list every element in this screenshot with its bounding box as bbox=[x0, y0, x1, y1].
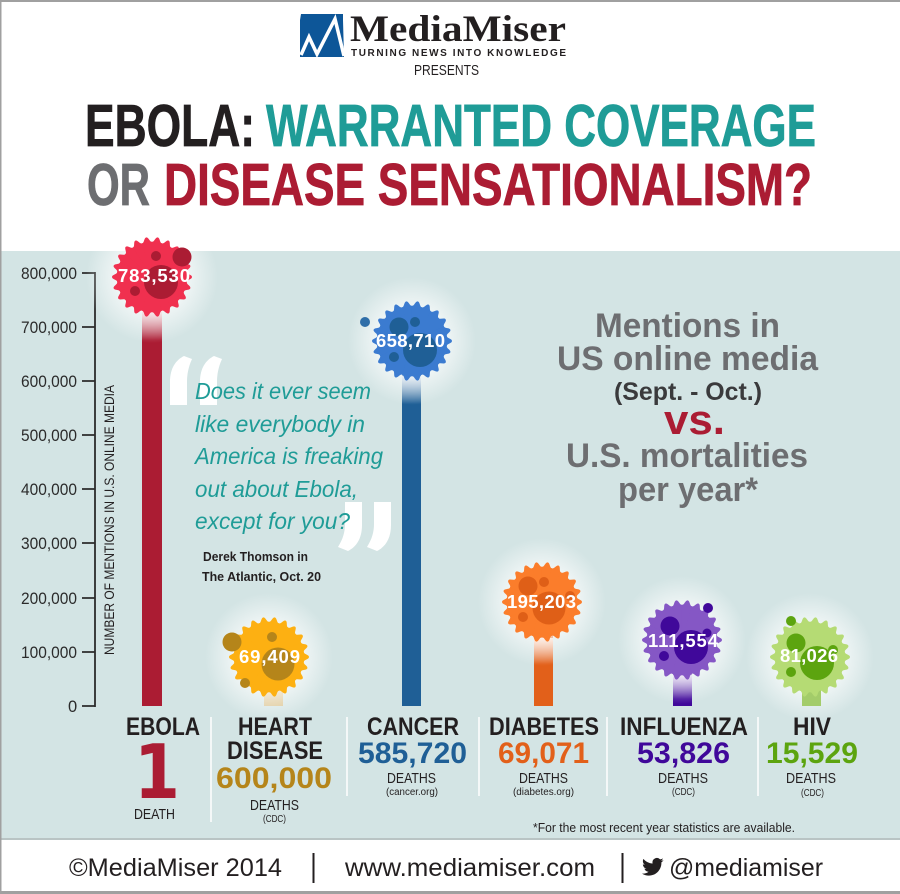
column: Influenza bbox=[620, 713, 748, 798]
column: Influenza: DEATHS bbox=[658, 770, 708, 787]
column: Influenza: (CDC) bbox=[672, 787, 695, 798]
column: Diabetes: DEATHS bbox=[519, 770, 568, 787]
column: Diabetes: 69,071 bbox=[498, 737, 589, 770]
footer bbox=[69, 853, 823, 883]
virus: HIV 81,026: 81,026 bbox=[780, 645, 838, 666]
footer website: www.mediamiser.com bbox=[344, 854, 595, 882]
logo: MediaMiser bbox=[300, 9, 566, 59]
presents label: PRESENTS bbox=[414, 62, 479, 79]
column: HIV: DEATHS bbox=[786, 770, 836, 787]
bar: Diabetes bbox=[478, 538, 606, 706]
quote text: Does it ever seem bbox=[195, 378, 371, 404]
footnote: *For the most recent year statistics are available. bbox=[533, 821, 795, 835]
heading: mentions vs mortalities: U.S. mortalities bbox=[566, 437, 808, 475]
bar: Cancer bbox=[348, 277, 476, 706]
footer twitter handle: @mediamiser bbox=[669, 854, 823, 882]
column: HIV: 15,529 bbox=[766, 737, 858, 770]
footer copyright: ©MediaMiser 2014 bbox=[69, 854, 282, 882]
column: Heart disease: (CDC) bbox=[263, 814, 286, 825]
title: OR bbox=[87, 152, 150, 218]
logo tagline: TURNING NEWS INTO KNOWLEDGE bbox=[351, 48, 566, 59]
heading: mentions vs mortalities: Mentions in bbox=[595, 307, 780, 345]
column: Heart disease: 600,000 bbox=[216, 762, 332, 795]
bar: Ebola bbox=[86, 211, 218, 706]
chart axis: 600,000 bbox=[21, 373, 77, 391]
chart axis: 300,000 bbox=[21, 535, 77, 553]
column: Cancer: DEATHS bbox=[387, 770, 436, 787]
column: Heart disease bbox=[216, 713, 332, 825]
logo wordmark: MediaMiser bbox=[350, 9, 566, 50]
virus: Cancer 658,710 bbox=[360, 301, 452, 381]
virus: Cancer 658,710: 658,710 bbox=[376, 330, 445, 351]
column: Influenza: 53,826 bbox=[637, 737, 730, 770]
virus: Influenza 111,554: 111,554 bbox=[648, 630, 719, 651]
column: Heart disease: DEATHS bbox=[250, 797, 299, 814]
heading: mentions vs mortalities: per year* bbox=[618, 471, 759, 509]
panel: chart background bbox=[0, 251, 900, 839]
chart axis: 700,000 bbox=[21, 319, 77, 337]
column: Diabetes: DIABETES bbox=[489, 713, 599, 741]
heading: mentions vs mortalities bbox=[557, 307, 819, 509]
quote attribution: Derek Thomson in bbox=[203, 550, 308, 564]
bar: Heart disease bbox=[205, 593, 333, 721]
icon: twitter bird bbox=[642, 858, 664, 876]
column: Ebola: 1 bbox=[134, 728, 180, 816]
virus: Ebola 783,530 bbox=[112, 237, 192, 317]
heading: mentions vs mortalities: (Sept. - Oct.) bbox=[614, 378, 762, 406]
virus: Diabetes 195,203: 195,203 bbox=[507, 591, 576, 612]
column: Influenza: INFLUENZA bbox=[620, 713, 748, 741]
quote text: America is freaking bbox=[193, 443, 383, 469]
chart axis: 400,000 bbox=[21, 481, 77, 499]
virus: Ebola 783,530: 783,530 bbox=[118, 265, 190, 286]
column: Cancer bbox=[358, 713, 467, 798]
column: Cancer: (cancer.org) bbox=[386, 787, 438, 798]
chart axis bbox=[21, 265, 95, 716]
title: EBOLA: bbox=[85, 93, 255, 159]
quote bbox=[170, 356, 391, 584]
column: Diabetes bbox=[489, 713, 599, 798]
virus: Heart disease 69,409: 69,409 bbox=[239, 646, 300, 667]
quote attribution bbox=[202, 550, 321, 584]
column: Heart disease: HEART bbox=[238, 713, 312, 741]
column: Diabetes: (diabetes.org) bbox=[513, 787, 574, 798]
column: Ebola: EBOLA bbox=[126, 713, 200, 741]
quote attribution: The Atlantic, Oct. 20 bbox=[202, 570, 321, 584]
column: Cancer: 585,720 bbox=[358, 737, 467, 770]
column: HIV bbox=[766, 713, 858, 799]
column: Ebola bbox=[126, 713, 200, 823]
column: Ebola: DEATH bbox=[134, 806, 175, 823]
column: Cancer: CANCER bbox=[367, 713, 459, 741]
virus: Diabetes 195,203 bbox=[502, 562, 582, 642]
column: Heart disease: DISEASE bbox=[227, 737, 323, 765]
quote text bbox=[193, 378, 383, 534]
quote text: out about Ebola, bbox=[195, 476, 358, 502]
icon: closing quotation mark bbox=[338, 502, 391, 551]
bar: HIV bbox=[746, 593, 874, 721]
chart axis: 200,000 bbox=[21, 590, 77, 608]
axis title: NUMBER OF MENTIONS IN U.S. ONLINE MEDIA bbox=[101, 384, 117, 655]
chart axis: 500,000 bbox=[21, 427, 77, 445]
icon: logo mark bbox=[300, 14, 344, 57]
chart axis: 0 bbox=[68, 698, 77, 716]
column: HIV: HIV bbox=[793, 713, 831, 741]
chart axis: 800,000 bbox=[21, 265, 77, 283]
column: HIV: (CDC) bbox=[801, 788, 824, 799]
title bbox=[85, 93, 816, 218]
heading: mentions vs mortalities: vs. bbox=[664, 396, 725, 443]
chart axis: 100,000 bbox=[21, 644, 77, 662]
icon: opening quotation mark bbox=[170, 356, 222, 405]
bar: Influenza bbox=[618, 576, 746, 706]
quote text: except for you? bbox=[195, 508, 350, 534]
heading: mentions vs mortalities: US online media bbox=[557, 340, 819, 378]
quote text: like everybody in bbox=[195, 411, 365, 437]
